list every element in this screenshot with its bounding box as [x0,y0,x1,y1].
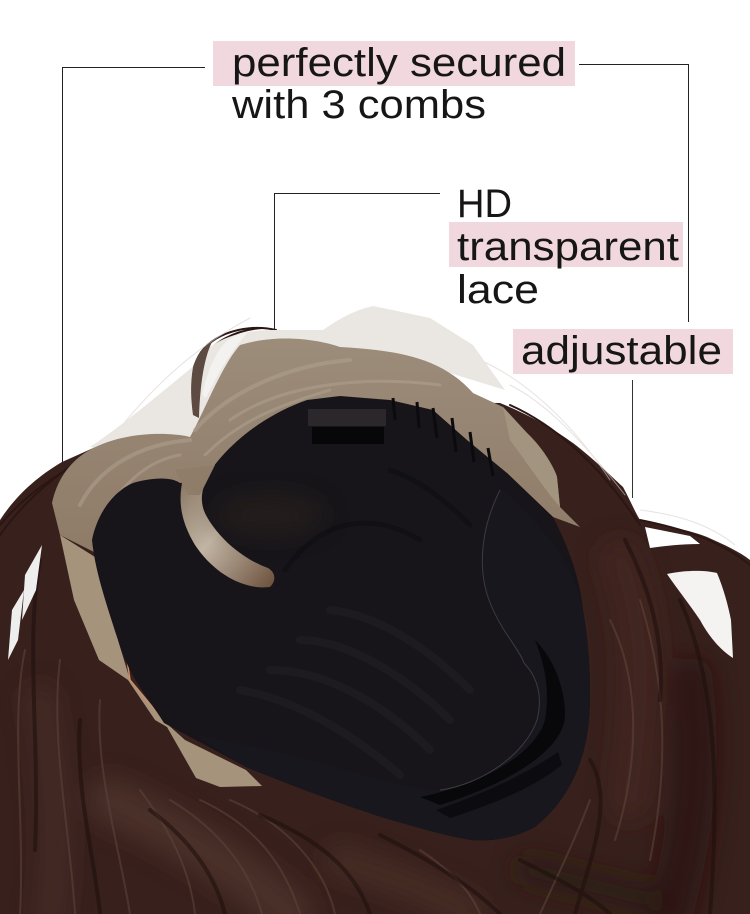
leader line: lace [274,194,440,345]
callout: perfectly secured with 3 combs: with 3 combs [231,83,486,127]
white gap between hair strands, right [667,571,733,658]
label text: adjustable [521,329,722,373]
lace edge net, right [503,407,560,507]
band edge highlight [440,490,539,790]
leader line: combs left [62,68,205,470]
lace strip edge [118,600,165,722]
callout: HD transparent lace: transparent [457,225,679,269]
callout: adjustable [513,329,733,374]
label text: HD [457,182,512,226]
white part sliver [202,332,248,398]
highlight [513,329,733,374]
callout: HD transparent lace [449,182,683,312]
adjustable band [195,488,590,840]
translucent lace top [90,306,505,450]
highlight [213,41,575,86]
leader line: combs right [579,64,688,322]
hair strands [0,318,750,914]
opaque lace [52,339,580,560]
band velcro strip [436,752,562,818]
white gap between hair strands, left [8,545,42,660]
cap inner dark folds [285,470,470,570]
cap brown mesh glow [215,493,325,537]
comb teeth [393,398,493,476]
leader line: adjustable [632,380,634,498]
lace highlights [80,360,440,520]
label text: perfectly secured [232,41,566,85]
callout: HD transparent lace: lace [457,268,539,312]
lace covering channel top [175,465,215,495]
hair part wisp [191,342,212,418]
comb tab [308,409,386,426]
lace channel [181,476,274,587]
hair mass [0,400,750,914]
hair tone patches [40,560,694,914]
cap mesh ribs [240,610,470,775]
wig photo [0,306,750,914]
band inner shadow [420,640,565,805]
black cap [92,396,590,840]
comb label mark [312,427,384,444]
callout: perfectly secured with 3 combs [213,41,575,127]
lace strip, left [60,535,262,787]
highlight [449,222,683,267]
